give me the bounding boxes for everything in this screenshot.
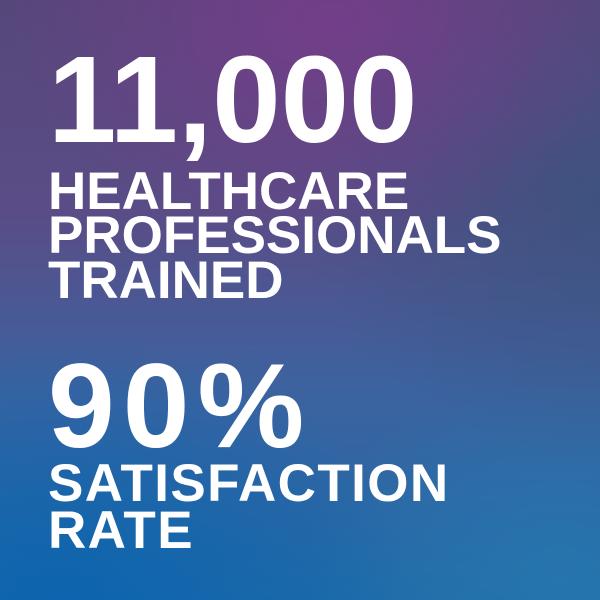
stat: 90%: 90%	[48, 339, 312, 473]
label line 2: RATE	[48, 501, 194, 560]
label line 2: PROFESSIONALS	[48, 206, 502, 265]
label line 1: HEALTHCARE	[48, 162, 409, 221]
label: satisfaction rate	[48, 454, 450, 560]
stat: 11,000: 11,000	[48, 32, 417, 169]
label line 3: TRAINED	[48, 251, 284, 310]
label line 1: SATISFACTION	[48, 454, 450, 513]
label: healthcare professionals trained	[48, 162, 502, 310]
